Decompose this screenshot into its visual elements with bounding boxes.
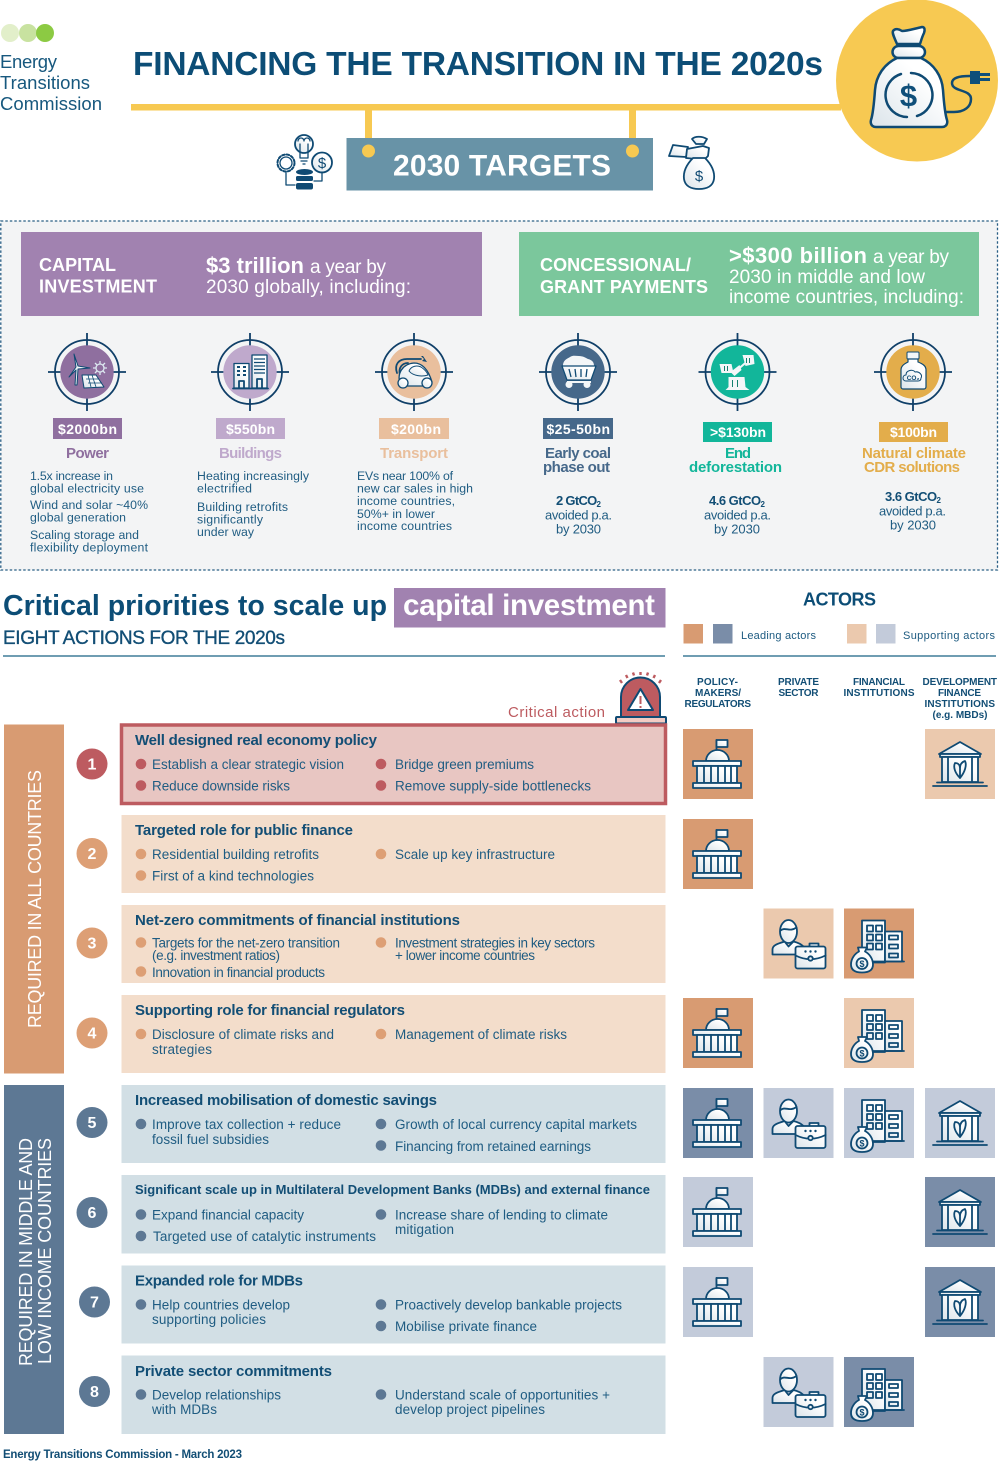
action 3: Innovation in financial products <box>152 965 325 980</box>
actor: action 7 development finance <box>925 1267 995 1337</box>
column header: policy-makers <box>684 677 751 710</box>
panel header: capital investment: $3 trillion <box>206 253 304 278</box>
action 4: 4 <box>88 1026 97 1042</box>
logo: Commission <box>0 93 102 114</box>
logo: Transitions <box>0 72 90 93</box>
icon: money bag with plug <box>836 0 998 162</box>
actor: action 3 financial institutions <box>844 908 914 978</box>
action 8: with MDBs <box>151 1402 217 1417</box>
action 7: Proactively develop bankable projects <box>395 1298 622 1312</box>
target: end deforestation <box>689 333 782 536</box>
target: buildings: Buildings <box>219 445 282 462</box>
action 3: Investment strategies in key sectors <box>395 936 595 950</box>
panel header: capital investment: a year by <box>310 257 386 278</box>
action 2: First of a kind technologies <box>152 868 314 884</box>
column header: private sector: SECTOR <box>778 688 819 699</box>
action 1: Remove supply-side bottlenecks <box>395 778 591 794</box>
logo: Energy <box>0 51 58 72</box>
action 2: Residential building retrofits <box>152 847 319 862</box>
action 6: Significant scale up in Multilateral Development Banks (MDBs) and external finance <box>135 1182 650 1197</box>
action 5: Financing from retained earnings <box>395 1139 591 1154</box>
icon: innovation funding <box>278 135 332 190</box>
header connector lines <box>131 104 841 139</box>
target: end deforestation: avoided p.a. <box>704 508 771 522</box>
target: early coal phase out: $25-50bn <box>546 421 610 437</box>
panel header: concessional grant payments: income countries, including: <box>729 287 964 308</box>
action 7: supporting policies <box>152 1312 266 1327</box>
action 5: Growth of local currency capital markets <box>395 1117 637 1132</box>
target: transport: 50%+ in lower <box>357 507 435 521</box>
actor: action 4 financial institutions <box>844 998 914 1068</box>
side label: required in all countries: REQUIRED IN ALL COUNTRIES <box>25 770 45 1028</box>
logo <box>0 24 102 114</box>
actor: action 1 policy-makers <box>683 729 753 799</box>
target: transport: Transport <box>380 445 448 462</box>
action 2 <box>76 815 666 893</box>
action 7: Expanded role for MDBs <box>135 1272 303 1290</box>
action 6: mitigation <box>395 1222 454 1237</box>
action 2: Scale up key infrastructure <box>395 847 555 862</box>
banner: 2030 targets <box>346 138 653 190</box>
target: natural climate solutions: Natural climate <box>862 445 966 462</box>
target: end deforestation: 4.6 GtCO <box>709 493 761 508</box>
column header: policy-makers: MAKERS/ <box>695 688 741 699</box>
icon: innovation funding: $ <box>318 155 327 172</box>
actor: action 8 private sector <box>764 1357 834 1427</box>
target: natural climate solutions: by 2030 <box>890 518 936 532</box>
target: end deforestation: >$130bn <box>710 424 766 440</box>
title: FINANCING THE TRANSITION IN THE 2020s <box>133 46 823 83</box>
actor: action 1 development finance <box>925 729 995 799</box>
target: natural climate solutions: 2 <box>937 496 942 505</box>
action 8: develop project pipelines <box>395 1402 545 1417</box>
actor: action 5 private sector <box>764 1088 834 1158</box>
target: power: global electricity use <box>30 482 144 496</box>
icon: buildings <box>211 333 289 411</box>
target: end deforestation: by 2030 <box>714 522 760 536</box>
target: transport: $200bn <box>391 421 441 437</box>
actor: action 6 development finance <box>925 1177 995 1247</box>
icon: money bag with plug: $ <box>900 78 917 113</box>
panel header: concessional grant payments: >$300 billion <box>729 243 867 268</box>
action 3: Net-zero commitments of financial institutions <box>135 912 460 929</box>
icon: money bag in hand <box>669 137 714 189</box>
target: transport: income countries <box>357 519 452 533</box>
column header: financial institutions: INSTITUTIONS <box>844 688 915 699</box>
action 5: Improve tax collection + reduce <box>152 1117 341 1132</box>
actor: action 4 policy-makers <box>683 998 753 1068</box>
column header: policy-makers: POLICY- <box>697 677 738 688</box>
action 4: Supporting role for financial regulators <box>135 1002 405 1019</box>
critical action marker: Critical action <box>508 704 605 721</box>
target: transport: income countries, <box>357 494 455 508</box>
target: buildings: Building retrofits <box>197 500 288 514</box>
action 5: 5 <box>88 1115 97 1132</box>
footer: Energy Transitions Commission - March 2023 <box>3 1449 242 1461</box>
action 8 <box>79 1356 666 1434</box>
target: buildings <box>197 333 310 539</box>
target: buildings: electrified <box>197 482 252 496</box>
target: early coal phase out: by 2030 <box>556 522 601 536</box>
action 5: Increased mobilisation of domestic savings <box>135 1092 437 1109</box>
column header: policy-makers: REGULATORS <box>684 699 751 710</box>
target: buildings: under way <box>197 525 255 539</box>
column header: development finance institutions: DEVELOPMENT <box>922 677 997 688</box>
action 8: Develop relationships <box>152 1388 281 1402</box>
side label: required in all countries <box>4 724 64 1074</box>
action 1: Bridge green premiums <box>395 757 534 772</box>
panel header: capital investment: 2030 globally, including: <box>206 277 411 298</box>
icon: electric car <box>375 333 453 411</box>
icon: wind and solar <box>48 333 126 411</box>
action 4: Management of climate risks <box>395 1027 567 1042</box>
actor: action 2 policy-makers <box>683 819 753 889</box>
action 7: Mobilise private finance <box>395 1319 537 1334</box>
action 3: 3 <box>88 936 97 952</box>
action 8: 8 <box>90 1384 99 1401</box>
column header: development finance institutions: FINANCE <box>938 688 981 699</box>
action 7: 7 <box>90 1294 99 1312</box>
target: early coal phase out: Early coal <box>545 445 611 462</box>
action 1: 1 <box>88 756 97 774</box>
target: power: global generation <box>30 511 126 525</box>
side label: required in middle and low income countries <box>4 1085 64 1434</box>
action 5: fossil fuel subsidies <box>152 1132 269 1147</box>
actor: action 5 financial institutions <box>844 1088 914 1158</box>
target: power: flexibility deployment <box>30 541 149 555</box>
action 6: Targeted use of catalytic instruments <box>153 1229 376 1244</box>
column header: financial institutions <box>844 677 915 699</box>
target: early coal phase out: avoided p.a. <box>545 508 612 522</box>
target: transport: new car sales in high <box>357 482 473 496</box>
icon: CO2 bottle <box>874 333 952 411</box>
icon: CO2 bottle: CO₂ <box>907 375 919 382</box>
actor: action 7 policy-makers <box>683 1267 753 1337</box>
action 4 <box>76 995 666 1073</box>
action 3: (e.g. investment ratios) <box>152 948 280 963</box>
target: transport <box>357 333 473 533</box>
icon: money bag in hand: $ <box>695 168 704 185</box>
panel header: concessional grant payments: 2030 in middle and low <box>729 267 925 288</box>
column header: private sector <box>778 677 819 699</box>
column header: development finance institutions <box>922 677 997 721</box>
action 8: Private sector commitments <box>135 1363 332 1380</box>
column header: development finance institutions: INSTITUTIONS <box>924 699 995 710</box>
action 5 <box>76 1085 666 1163</box>
column header: financial institutions: FINANCIAL <box>853 677 905 688</box>
target: early coal phase out <box>539 333 617 536</box>
panel header: concessional grant payments: a year by <box>873 247 950 268</box>
column header: private sector: PRIVATE <box>778 677 819 688</box>
action 4: Disclosure of climate risks and <box>152 1027 334 1042</box>
legend: leading and supporting actors <box>684 624 996 644</box>
action 1 <box>76 725 666 804</box>
action 8: Understand scale of opportunities + <box>395 1388 610 1402</box>
actor: action 3 private sector <box>764 908 834 978</box>
target: end deforestation: 2 <box>761 500 766 509</box>
target: power <box>30 333 149 555</box>
column header: development finance institutions: (e.g. MBDs) <box>932 710 988 721</box>
target: buildings: $550bn <box>226 421 275 437</box>
action 1: Establish a clear strategic vision <box>152 757 344 772</box>
target: natural climate solutions: CDR solutions <box>864 459 960 476</box>
target: power: Scaling storage and <box>30 528 139 542</box>
target: natural climate solutions: 3.6 GtCO <box>885 489 937 504</box>
heading tag: capital investment: capital investment <box>403 589 655 622</box>
target: buildings: Heating increasingly <box>197 469 310 483</box>
icon: tree stumps and axe <box>698 333 776 411</box>
panel header: concessional grant payments <box>519 232 979 316</box>
action 4: strategies <box>152 1042 212 1057</box>
target: transport: EVs near 100% of <box>357 469 454 483</box>
heading: critical priorities: Critical priorities to scale up <box>3 590 387 622</box>
actor: action 8 financial institutions <box>844 1357 914 1427</box>
target: end deforestation: End <box>725 445 751 462</box>
heading: actors: ACTORS <box>803 590 876 610</box>
panel header: capital investment: INVESTMENT <box>39 276 157 296</box>
panel: 2030 targets <box>1 221 998 570</box>
panel header: concessional grant payments: GRANT PAYMENTS <box>540 277 708 297</box>
actor: action 5 development finance <box>925 1088 995 1158</box>
panel header: capital investment <box>21 232 482 316</box>
action 3: Targets for the net-zero transition <box>152 936 340 950</box>
action 2: Targeted role for public finance <box>135 822 353 839</box>
action 3: + lower income countries <box>395 948 535 963</box>
icon: coal cart <box>539 333 617 411</box>
action 7: Help countries develop <box>152 1298 290 1312</box>
target: early coal phase out: 2 <box>597 500 602 509</box>
action 6: Increase share of lending to climate <box>395 1208 608 1222</box>
panel header: capital investment: CAPITAL <box>39 255 116 275</box>
target: buildings: significantly <box>197 512 264 526</box>
target: natural climate solutions: avoided p.a. <box>879 504 946 518</box>
action 1: Reduce downside risks <box>152 778 290 794</box>
target: end deforestation: deforestation <box>689 459 782 476</box>
action 6: 6 <box>88 1205 97 1222</box>
action 6: Expand financial capacity <box>152 1208 304 1222</box>
critical action marker <box>508 672 666 724</box>
target: natural climate solutions: $100bn <box>890 424 937 440</box>
actor: action 6 policy-makers <box>683 1177 753 1247</box>
side label: required in middle and low income countries: LOW INCOME COUNTRIES <box>35 1138 55 1364</box>
target: power: Power <box>66 445 109 462</box>
legend: leading and supporting actors: Supporting actors <box>903 630 996 642</box>
action 3 <box>76 905 666 983</box>
banner: 2030 targets: 2030 TARGETS <box>393 150 611 182</box>
target: power: $2000bn <box>58 421 117 437</box>
action 7 <box>79 1266 666 1344</box>
action 2: 2 <box>88 846 97 863</box>
action 1: Well designed real economy policy <box>135 732 378 749</box>
target: natural climate solutions <box>862 333 966 532</box>
actor: action 5 policy-makers <box>683 1088 753 1158</box>
panel header: concessional grant payments: CONCESSIONAL/ <box>540 255 691 275</box>
subheading: EIGHT ACTIONS FOR THE 2020s <box>3 628 285 649</box>
target: early coal phase out: 2 GtCO <box>556 493 597 508</box>
action 6 <box>76 1175 666 1254</box>
side label: required in middle and low income countries: REQUIRED IN MIDDLE AND <box>16 1138 36 1366</box>
icon: alarm beacon <box>616 672 666 724</box>
target: power: Wind and solar ~40% <box>30 498 148 512</box>
legend: leading and supporting actors: Leading actors <box>741 630 816 642</box>
target: early coal phase out: phase out <box>543 459 610 476</box>
target: power: 1.5x increase in <box>30 469 113 483</box>
